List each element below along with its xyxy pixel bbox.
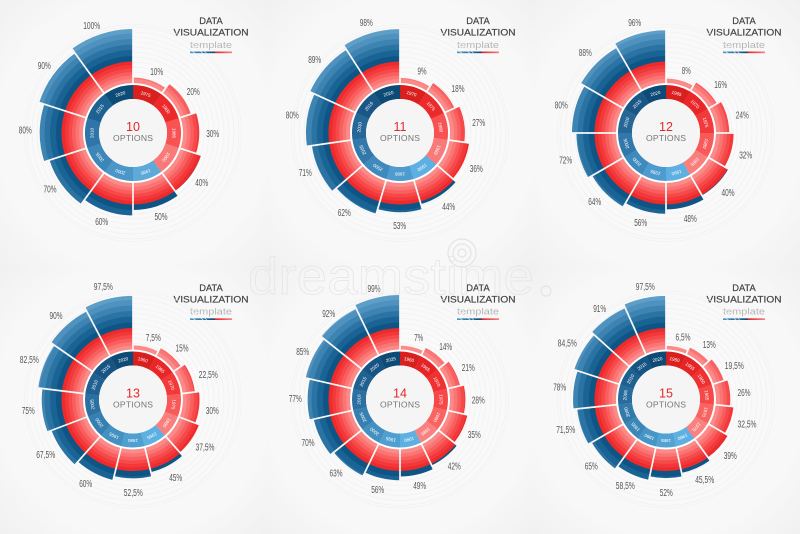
year labels (623, 90, 709, 176)
percentage labels: 45,5% (695, 475, 714, 486)
year labels (357, 356, 443, 443)
year labels: 1985 (146, 431, 158, 441)
year labels: 1970 (432, 376, 442, 388)
year labels: 2020 (118, 356, 129, 363)
percentage labels: 72% (559, 156, 572, 166)
year labels: 2000 (631, 156, 642, 167)
year labels: 1965 (155, 364, 166, 374)
title: VISUALIZATION (706, 28, 782, 38)
percentage labels: 70% (44, 184, 57, 196)
percentage labels: 77% (289, 394, 302, 405)
percentage labels (286, 18, 485, 232)
year labels: 1970 (167, 379, 176, 391)
percentage labels: 63% (330, 468, 343, 480)
center label: 13 (126, 386, 140, 400)
percentage labels: 97,5% (94, 282, 113, 293)
percentage labels: 100% (83, 21, 100, 32)
year labels: 2020 (369, 362, 380, 373)
year labels: 1995 (140, 168, 151, 176)
percentage labels (553, 282, 757, 499)
year labels: 1975 (702, 117, 709, 128)
percentage labels: 96% (628, 18, 641, 29)
percentage labels: 13% (703, 340, 716, 351)
percentage labels: 98% (360, 18, 373, 29)
year labels: 2020 (650, 90, 661, 97)
year labels: 1975 (691, 421, 702, 433)
year labels: 1980 (161, 417, 172, 429)
percentage labels: 80% (555, 100, 568, 112)
year labels: 1985 (660, 438, 671, 443)
center label: 11 (394, 120, 407, 134)
percentage labels: 40% (722, 188, 735, 199)
year labels: 2005 (89, 399, 95, 410)
title: template (190, 40, 232, 50)
percentage labels: 40% (195, 178, 208, 189)
percentage labels: 42% (448, 462, 461, 472)
center label: OPTIONS (646, 400, 686, 410)
center label (380, 386, 420, 410)
center label: OPTIONS (646, 133, 686, 143)
title (174, 16, 248, 53)
percentage labels: 71% (299, 168, 312, 179)
title: VISUALIZATION (174, 28, 248, 38)
percentage labels: 8% (682, 66, 691, 77)
center label: OPTIONS (380, 400, 420, 410)
radial chart (558, 291, 774, 508)
title: DATA (732, 283, 757, 293)
year labels: 2015 (95, 103, 105, 115)
year labels: 1990 (671, 169, 682, 176)
percentage labels: 35% (468, 430, 481, 441)
year labels: 2015 (632, 98, 643, 109)
year labels: 2005 (358, 144, 367, 156)
year labels: 1990 (127, 438, 138, 443)
percentage labels: 45% (169, 473, 182, 484)
year labels: 1970 (690, 99, 701, 110)
year labels: 1995 (108, 431, 120, 440)
year labels: 1965 (671, 90, 683, 97)
title (440, 283, 516, 320)
year labels: 1960 (137, 356, 149, 364)
year labels (622, 356, 710, 443)
year labels: 1975 (426, 101, 436, 112)
year labels: 2005 (622, 389, 628, 401)
year labels: 2005 (623, 138, 630, 149)
year labels: 1985 (433, 144, 442, 156)
percentage labels: 80% (286, 110, 299, 122)
percentage labels: 27% (472, 118, 485, 129)
percentage labels: 20% (187, 87, 200, 98)
percentage labels: 7,5% (146, 333, 161, 344)
center label (646, 386, 686, 410)
percentage labels: 48% (684, 214, 697, 225)
year labels: 2005 (358, 411, 368, 423)
radial chart (24, 291, 242, 508)
year labels: 1965 (704, 390, 710, 401)
percentage labels: 52,5% (124, 488, 143, 499)
percentage labels: 99% (368, 284, 381, 295)
percentage labels: 65% (585, 462, 598, 472)
center label: OPTIONS (113, 400, 153, 410)
percentage labels: 90% (38, 61, 51, 72)
year labels: 1955 (684, 361, 696, 372)
center label: 14 (393, 386, 407, 400)
percentage labels: 26% (738, 388, 751, 399)
title (706, 16, 782, 53)
year labels: 2010 (91, 379, 99, 391)
title (174, 283, 248, 320)
year labels: 2020 (652, 356, 663, 363)
percentage labels: 89% (308, 55, 321, 66)
year labels: 1985 (171, 128, 176, 139)
percentage labels: 44% (442, 202, 455, 213)
year labels: 1990 (643, 432, 655, 441)
center label: OPTIONS (113, 133, 153, 143)
percentage labels: 14% (439, 342, 452, 353)
percentage labels: 82,5% (20, 355, 39, 366)
percentage labels: 56% (634, 218, 647, 229)
watermark: dreamstime (248, 248, 534, 306)
percentage labels: 30% (206, 129, 219, 140)
percentage labels: 52% (660, 488, 673, 499)
title: DATA (466, 16, 491, 26)
radial chart (558, 24, 774, 242)
year labels: 1960 (697, 373, 706, 385)
percentage labels: 6,5% (676, 332, 691, 344)
year labels: 1960 (404, 356, 415, 363)
percentage labels: 16% (714, 80, 727, 91)
percentage labels: 10% (150, 67, 163, 78)
title: DATA (199, 283, 224, 293)
percentage labels: 60% (95, 217, 108, 228)
year labels: 2000 (623, 406, 631, 418)
title: template (723, 306, 765, 316)
percentage labels: 88% (579, 48, 592, 59)
percentage labels: 64% (588, 197, 601, 208)
year labels: 1980 (161, 103, 171, 115)
radial chart (292, 291, 508, 508)
year labels: 2005 (95, 151, 105, 163)
year labels: 1975 (170, 399, 177, 410)
title (440, 16, 516, 53)
percentage labels: 70% (302, 438, 315, 449)
percentage labels: 92% (322, 309, 335, 320)
percentage labels: 62% (338, 208, 351, 219)
year labels (356, 90, 444, 176)
year labels: 2010 (626, 373, 636, 385)
year labels: 2015 (100, 363, 112, 374)
percentage labels: 84,5% (558, 338, 577, 350)
percentage labels (20, 282, 219, 499)
year labels: 1995 (649, 169, 661, 176)
year labels: 2020 (115, 90, 126, 98)
percentage labels (19, 21, 219, 228)
percentage labels: 19,5% (725, 361, 744, 372)
percentage labels: 71,5% (556, 425, 575, 436)
title: template (723, 40, 765, 50)
percentage labels: 91% (593, 304, 606, 315)
percentage labels: 37,5% (196, 442, 215, 454)
percentage labels: 58,5% (616, 481, 635, 492)
year labels: 1985 (420, 426, 431, 437)
percentage labels: 39% (724, 451, 737, 462)
percentage labels: 97,5% (636, 282, 655, 293)
year labels: 1980 (702, 138, 709, 150)
year labels: 2010 (357, 394, 362, 405)
title: template (457, 40, 499, 50)
percentage labels: 36% (470, 164, 483, 175)
year labels: 1970 (701, 406, 709, 418)
year labels: 2010 (623, 116, 630, 128)
year labels: 1975 (438, 394, 443, 405)
radial chart (24, 24, 242, 242)
year labels: 1995 (394, 171, 405, 176)
center label (646, 120, 686, 143)
percentage labels (289, 284, 485, 496)
center label: 12 (659, 120, 673, 134)
center label (380, 120, 420, 143)
percentage labels: 49% (413, 481, 426, 492)
panel: 13 options (20, 283, 248, 498)
year labels: 2000 (372, 162, 384, 172)
percentage labels: 78% (553, 382, 566, 394)
panel: 10 options (19, 17, 248, 225)
title: DATA (199, 16, 224, 26)
year labels: 2000 (369, 426, 380, 437)
year labels: 2010 (356, 121, 363, 133)
center label: OPTIONS (380, 133, 420, 143)
title: VISUALIZATION (440, 294, 516, 304)
year labels: 1965 (420, 362, 431, 373)
year labels: 1980 (677, 432, 688, 441)
percentage labels: 80% (19, 126, 32, 136)
year labels: 1995 (385, 436, 396, 443)
title: VISUALIZATION (706, 294, 782, 304)
year labels (89, 356, 177, 443)
percentage labels: 7% (414, 333, 423, 344)
percentage labels: 15% (176, 344, 189, 354)
title: template (457, 306, 499, 316)
percentage labels (555, 18, 752, 229)
percentage labels: 30% (206, 406, 219, 417)
year labels: 1980 (437, 122, 444, 133)
year labels: 1985 (689, 157, 700, 168)
percentage labels: 18% (452, 84, 465, 95)
percentage labels: 22,5% (199, 370, 218, 381)
title: DATA (732, 16, 757, 26)
center label: 15 (659, 386, 673, 400)
year labels: 2010 (90, 127, 95, 138)
year labels: 2000 (94, 417, 104, 428)
center label (113, 386, 153, 410)
percentage labels: 32% (739, 150, 752, 162)
percentage labels: 21% (462, 363, 475, 374)
percentage labels: 28% (472, 396, 485, 406)
year labels: 2000 (114, 168, 126, 176)
panel: 14 options (289, 284, 515, 493)
year labels: 2025 (385, 356, 397, 363)
panel: 12 options (555, 17, 781, 226)
radial chart (292, 24, 508, 242)
year labels: 1995 (630, 421, 641, 432)
center label: 10 (126, 120, 140, 134)
year labels: 2020 (383, 90, 395, 98)
percentage labels: 90% (50, 311, 63, 322)
title: VISUALIZATION (440, 28, 516, 38)
year labels: 1990 (161, 151, 171, 163)
year labels: 1970 (406, 90, 418, 98)
panel: 11 options (286, 17, 515, 229)
percentage labels: 60% (79, 479, 92, 490)
panel: 15 options (554, 283, 781, 496)
title: template (190, 306, 232, 316)
center label (113, 120, 153, 143)
percentage labels: 67,5% (36, 450, 55, 461)
percentage labels: 32,5% (738, 420, 757, 430)
percentage labels: 56% (371, 485, 384, 496)
year labels: 2015 (636, 361, 648, 371)
percentage labels: 9% (418, 66, 427, 78)
percentage labels: 53% (393, 221, 406, 232)
year labels (90, 90, 176, 176)
year labels: 2015 (359, 376, 368, 387)
percentage labels: 75% (22, 406, 35, 417)
year labels: 1950 (669, 356, 680, 363)
percentage labels: 85% (296, 347, 309, 358)
title: DATA (466, 283, 491, 293)
year labels: 2015 (364, 100, 375, 112)
percentage labels: 24% (736, 110, 749, 122)
year labels: 1980 (432, 412, 441, 423)
year labels: 1990 (416, 163, 428, 173)
percentage labels: 50% (154, 212, 168, 223)
year labels: 1975 (140, 90, 152, 98)
year labels: 1990 (403, 436, 415, 443)
title: VISUALIZATION (174, 294, 248, 304)
title (706, 283, 782, 320)
